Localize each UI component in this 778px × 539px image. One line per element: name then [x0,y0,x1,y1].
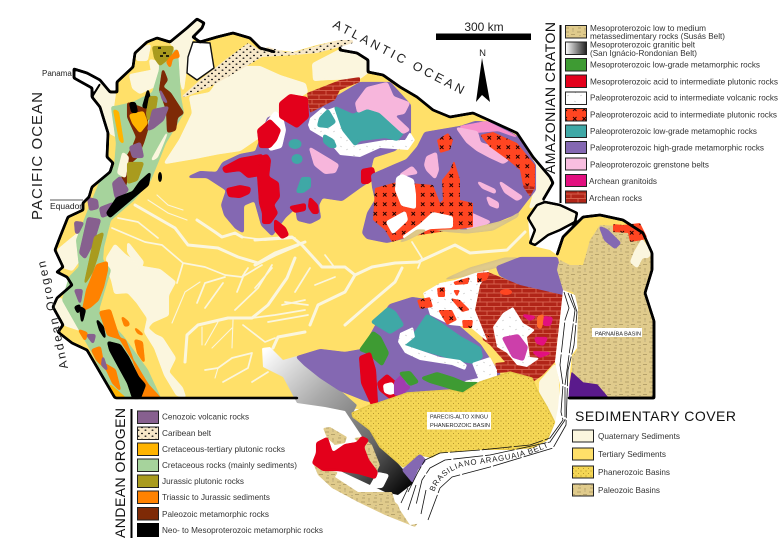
legend item: Paleoproterozoic plutonic: Paleoproterozoic acid to intermediate plutonic rocks [590,110,777,120]
map: Marajó island [528,202,577,245]
map: northern Amazonian craton, west lobe [189,77,415,238]
legend item: Triassic to Jurassic [138,491,270,504]
legend item: Cretaceous rocks [138,459,297,472]
map: Parnaiba basin [557,223,653,398]
legend item: granitic belt: Mesoproterozoic granitic belt [590,40,696,50]
legend item: Archean granitoids: Archean granitoids [589,177,657,186]
scale bar: 300 km [464,20,504,34]
legend item: greenstone belts [566,158,709,170]
legend item: Phanerozoic: Phanerozoic Basins [598,468,670,477]
legend item: Caribean belt [138,427,212,440]
north arrow [476,48,490,102]
legend item: Caribean belt: Caribean belt [162,429,212,438]
legend item: Tertiary: Tertiary Sediments [598,450,666,459]
legend item: Mesoproterozoic plutonic [566,75,778,88]
label: Parecis-Alto Xingu Phanerozoic basin: PHANEROZOIC BASIN [430,423,490,429]
legend item: granitic belt: (San Ignácio-Rondonian Belt) [590,49,697,58]
legend item: Quaternary: Quaternary Sediments [598,432,680,441]
legend item: Paleozoic: Paleozoic Basins [598,486,660,495]
map: Parecis-Alto Xingu Phanerozoic basin [352,372,555,467]
label: Panama: Panama [42,69,72,78]
legend item: Cretaceous-tertiary plutonic [138,443,285,456]
legend item: greenstone belts: Paleoproterozoic grenstone belts [590,160,709,170]
legend item: low-grade metamorphic [566,58,760,71]
legend item: Archean granitoids [566,174,657,186]
legend item: Phanerozoic [572,466,670,478]
legend item: Cretaceous-tertiary plutonic: Cretaceous-tertiary plutonic rocks [162,445,285,454]
legend item: Susas belt: metassedimentary rocks (Susás Belt) [590,32,725,41]
legend item: Cenozoic volcanic: Cenozoic volcanic rocks [162,412,249,422]
north arrow: N [479,48,486,59]
legend item: Paleoproterozoic plutonic [566,108,777,121]
legend item: Paleozoic metamorphic: Paleozoic metamorphic rocks [162,510,269,519]
label: Equador: Equador [50,201,82,211]
scale bar [436,20,531,40]
legend item: Mesoproterozoic plutonic: Mesoproterozoic acid to intermediate plutonic rocks [590,78,778,86]
label: Parecis-Alto Xingu Phanerozoic basin: PARECIS-ALTO XINGU [430,414,488,420]
legend item: Archean rocks [566,191,642,203]
label: Parnaiba basin: PARNAÍBA BASIN [595,330,641,338]
legend: sedimentary cover [572,408,736,496]
legend item: Neo- to Mesoproterozoic [137,523,323,537]
legend item: Paleoproterozoic low-grade: Paleoproterozoic low-grade metamophic rocks [590,127,757,136]
map: Brasiliano Araguaia belt: BRASILIANO ARAGUAIA BELT [430,442,547,492]
legend item: Archean rocks: Archean rocks [589,194,642,203]
map: northern Amazonian craton, east lobe [363,122,535,243]
legend item: Tertiary [572,448,666,460]
legend item: Paleoproterozoic volcanic: Paleoproterozoic acid to intermediate volcanic rocks [590,94,778,102]
map: Brasiliano Araguaia belt [398,290,578,525]
legend item: Quaternary [572,430,680,442]
legend item: low-grade metamorphic: Mesoproterozoic low-grade metamorphic rocks [590,60,760,70]
map: southern tan Susas belt and red plutonic block [313,427,425,527]
legend item: Triassic to Jurassic: Triassic to Jurassic sediments [162,493,270,502]
legend item: granitic belt [566,40,697,58]
legend item: Paleoproterozoic volcanic [566,92,778,104]
legend item: Jurassic plutonic: Jurassic plutonic rocks [162,477,244,486]
legend item: Paleoproterozoic high-grade [566,142,764,154]
legend item: Susas belt: Mesoproterozoic low to medium [590,24,706,33]
map: Panama isthmus [74,69,117,97]
heading: Andean orogen: ANDEAN OROGEN [112,408,128,538]
legend item: Paleoproterozoic low-grade [566,125,757,138]
heading: Amazonian craton: AMAZONIAN CRATON [542,22,558,174]
legend: Amazonian craton [542,22,778,203]
legend item: Jurassic plutonic [138,475,244,488]
map: quaternary sediments and rivers [53,19,558,423]
legend item: Cenozoic volcanic [138,411,249,424]
label: Atlantic Ocean: ATLANTIC OCEAN [331,17,467,97]
legend item: Neo- to Mesoproterozoic: Neo- to Mesoproterozoic metamorphic rocks [162,526,323,535]
label: Andean Orogen: Andean Orogen [34,260,71,370]
map: southern Amazonian craton [297,258,563,405]
legend item: Paleoproterozoic high-grade: Paleoproterozoic high-grade metamorphic rocks [590,144,764,152]
label: Parnaiba basin [592,328,642,338]
legend item: Paleozoic [572,484,660,496]
heading: sedimentary cover: SEDIMENTARY COVER [575,408,736,424]
label: Pacific Ocean: PACIFIC OCEAN [29,92,46,220]
map: Caribean belt [181,40,353,97]
legend: Andean orogen [112,408,323,538]
legend item: Paleozoic metamorphic [138,508,269,520]
map: land base of tertiary sediments [53,19,654,410]
map: Mesoproterozoic granitic belt [262,347,415,495]
legend item: Cretaceous rocks: Cretaceous rocks (mainly sediments) [162,461,297,470]
legend item: Susas belt [566,24,725,41]
map: coastline [53,19,654,398]
map: Andean orogen [63,42,214,398]
label: Parecis-Alto Xingu Phanerozoic basin [427,412,491,430]
